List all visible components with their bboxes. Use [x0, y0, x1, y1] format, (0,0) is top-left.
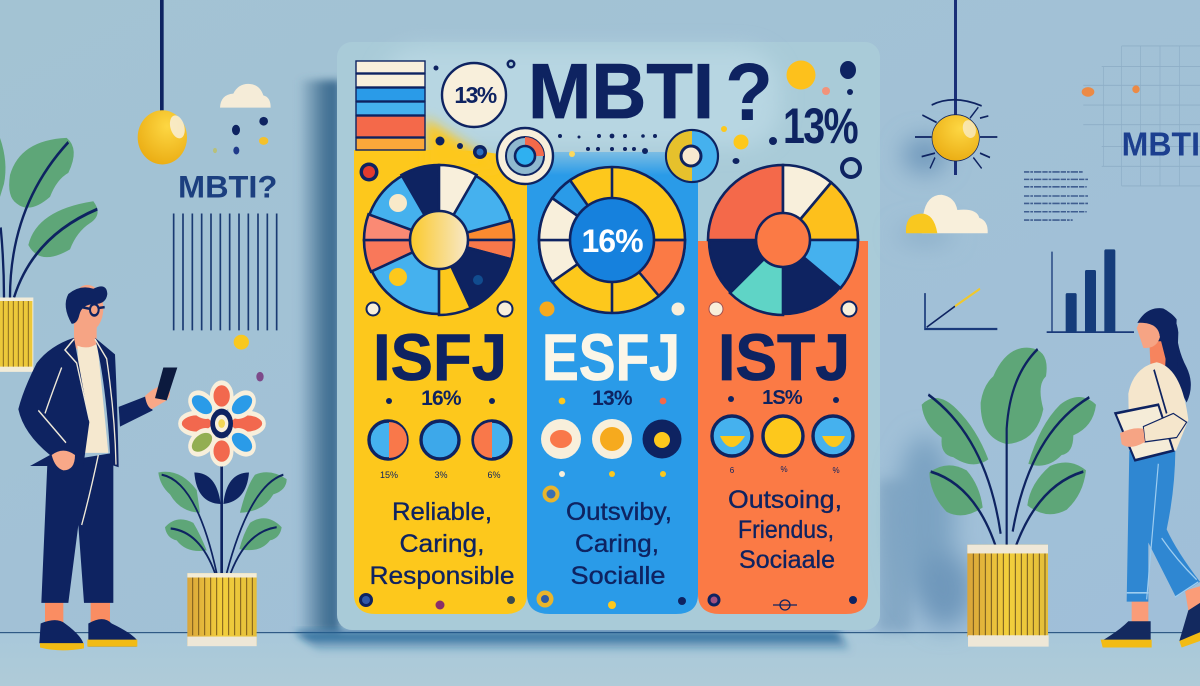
wall text: MBTI?: MBTI? [178, 170, 277, 204]
left wall scene [0, 0, 287, 650]
faint grid [1083, 46, 1200, 186]
percent ISFJ: 16% [421, 387, 462, 410]
mini circles ESFJ [541, 419, 682, 459]
leaves [981, 348, 1047, 444]
center percent ESFJ: 16% [581, 223, 643, 259]
stem and leaves [218, 466, 226, 574]
percent ISTJ: 1S% [762, 387, 803, 409]
arm [1143, 413, 1187, 442]
column: ESFJ [527, 152, 698, 614]
mini labels ISTJ [730, 465, 840, 475]
label ESFJ: ESFJ [542, 320, 680, 394]
mini labels ISTJ: % [780, 465, 788, 474]
shoes [39, 620, 83, 649]
pie chart ISTJ [708, 165, 858, 315]
shirt [77, 343, 108, 453]
pants [41, 453, 113, 603]
traits ESFJ: Outsviby, [566, 498, 672, 526]
target ring right [666, 130, 718, 182]
legs skin [1132, 586, 1200, 623]
glasses [82, 304, 105, 315]
badge: 13%: 13% [454, 82, 497, 108]
target ring left [497, 128, 553, 184]
blue background [527, 152, 698, 614]
traits ISTJ: Friendus, [738, 516, 834, 544]
wall text: MBTI: MBTI [1122, 126, 1200, 163]
top [1128, 362, 1188, 451]
mini labels ISFJ: 6% [487, 470, 501, 480]
right wall scene [906, 0, 1200, 648]
traits ESFJ: Socialle [570, 562, 666, 590]
traits ISTJ [728, 486, 842, 574]
pot [967, 545, 1048, 637]
sun lamp [915, 0, 997, 175]
pie corner dots [366, 302, 856, 316]
mini labels ISTJ: 6 [730, 466, 735, 475]
pie chart ESFJ [539, 167, 685, 313]
jacket [18, 338, 119, 467]
traits ISFJ: Reliable, [392, 498, 492, 526]
mini labels ISFJ: 3% [434, 470, 448, 480]
orange background [698, 241, 868, 614]
main panel [337, 42, 880, 630]
traits ISTJ: Outsoing, [728, 486, 842, 514]
yellow background [354, 150, 527, 614]
floor [0, 632, 1200, 686]
hanging plant [0, 138, 98, 372]
bar chart [1047, 249, 1134, 332]
purple dot [256, 372, 264, 382]
label ISFJ: ISFJ [373, 320, 507, 394]
barcode lines [174, 214, 277, 330]
small caption lines [1024, 172, 1089, 220]
pie chart ISFJ [364, 165, 514, 315]
line chart [925, 289, 997, 329]
small cloud [220, 84, 271, 108]
yellow dot [234, 335, 249, 350]
traits ESFJ [566, 498, 672, 590]
flower plant [158, 383, 287, 646]
label ISTJ: ISTJ [718, 320, 850, 394]
face [1137, 319, 1160, 348]
hanging lamp [138, 0, 188, 164]
percent ESFJ: 13% [592, 387, 633, 410]
hair back [1143, 309, 1191, 402]
mini labels ISFJ: 15% [380, 470, 398, 480]
feet [45, 599, 110, 623]
traits ISTJ: Sociaale [739, 546, 835, 574]
right wall shadows [895, 137, 973, 628]
question mark: ? [725, 47, 773, 138]
stems [928, 349, 1089, 551]
man with phone [18, 285, 177, 650]
cloud dots [213, 117, 268, 154]
hands [52, 385, 170, 470]
panel shadow [295, 80, 912, 652]
flower pot [187, 573, 257, 645]
woman with tablet [1101, 308, 1200, 648]
mini labels ISFJ [380, 470, 501, 480]
neck and head [74, 313, 97, 357]
orange marks [1082, 85, 1140, 97]
traits ISFJ [370, 498, 514, 590]
mini labels ISTJ: % [832, 466, 840, 475]
mini circles ISFJ [369, 421, 511, 459]
pants [1127, 451, 1200, 602]
hair [66, 286, 107, 324]
cream cloud with yellow [906, 195, 988, 233]
column: ISFJ [354, 118, 527, 614]
hair front [1137, 308, 1178, 381]
column: ISTJ [698, 165, 868, 614]
decorative dots [359, 60, 862, 610]
traits ESFJ: Caring, [575, 530, 659, 558]
corner percent 13%: 13% [783, 98, 858, 154]
stacked color chart [356, 61, 425, 150]
badge: 13% [442, 63, 506, 127]
traits ISFJ: Caring, [400, 530, 484, 558]
mini circles ISTJ [712, 416, 853, 456]
title: MBTI [528, 47, 714, 135]
yellow soft top [425, 118, 505, 170]
tablet [1115, 405, 1173, 460]
petals [180, 383, 264, 464]
phone [155, 368, 177, 400]
neck [1149, 341, 1167, 370]
traits ISFJ: Responsible [370, 562, 514, 590]
shoes [1102, 621, 1151, 641]
large plant [922, 348, 1096, 647]
